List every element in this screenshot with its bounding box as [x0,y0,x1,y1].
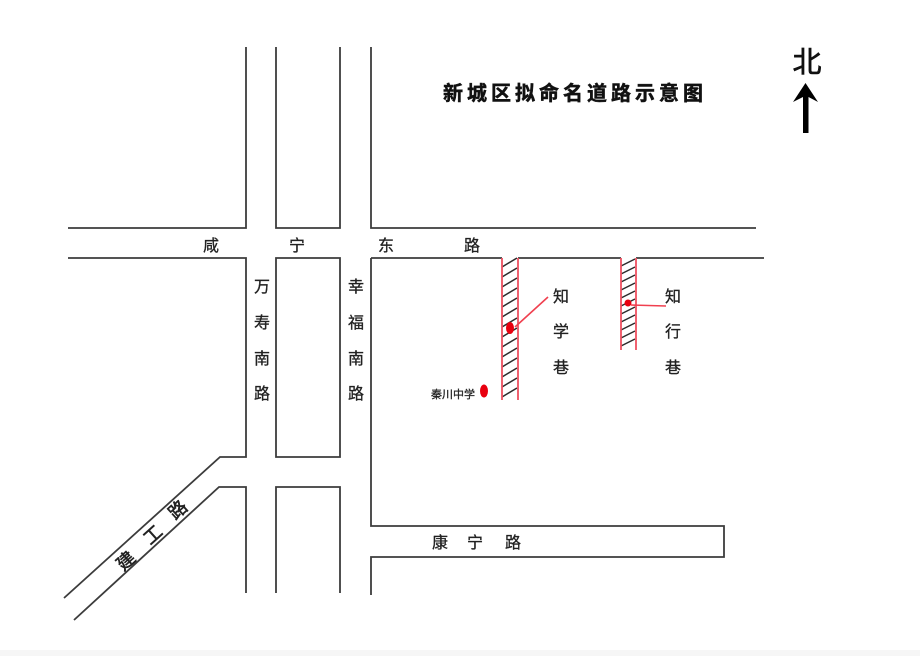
road label: 咸宁东路: 路 [464,237,480,255]
road label: 万寿南路: 路 [254,385,270,403]
label: 知学巷: 巷 [553,359,569,377]
road label: 咸宁东路: 咸 [203,237,219,255]
road label: 建工路: 建 [113,548,139,574]
lane: 知行巷 hatched [621,258,636,350]
road label: 建工路: 工 [140,522,166,548]
road label: 幸福南路: 福 [348,314,364,332]
road label: 康宁路: 康 [432,534,448,552]
label: 知行巷 [665,288,681,377]
road label: 万寿南路: 寿 [254,314,270,332]
road network [64,47,764,620]
label: 知行巷: 巷 [665,359,681,377]
road label: 康宁路: 路 [505,534,521,552]
road label: 万寿南路 [254,279,270,403]
label: 知学巷: 知 [553,288,569,306]
label: 知行巷: 知 [665,288,681,306]
school marker: 秦川中学: 秦川中学 [431,387,475,401]
label: 知行巷: 行 [665,323,681,341]
road label: 幸福南路: 路 [348,385,364,403]
road label: 咸宁东路 [203,237,480,255]
lane: 知学巷 hatched [502,258,518,400]
label: 知学巷: 学 [553,323,569,341]
road label: 康宁路 [432,534,521,552]
road label: 咸宁东路: 东 [378,237,394,255]
north arrow [792,47,822,133]
road label: 万寿南路: 万 [254,279,270,296]
marker: 知行巷 [624,300,666,306]
road label: 建工路 [113,497,191,574]
school marker: 秦川中学 [431,384,488,401]
road label: 咸宁东路: 宁 [289,237,305,255]
road label: 建工路: 路 [165,497,191,523]
road label: 康宁路: 宁 [467,534,483,552]
road label: 万寿南路: 南 [254,350,270,368]
road label: 幸福南路: 南 [348,350,364,368]
label: 知学巷 [553,288,569,377]
north arrow: 北 [792,47,822,79]
road label: 幸福南路 [348,278,364,403]
road label: 幸福南路: 幸 [348,278,364,296]
title: 新城区拟命名道路示意图 [443,81,707,105]
marker: 知学巷 [506,297,548,334]
